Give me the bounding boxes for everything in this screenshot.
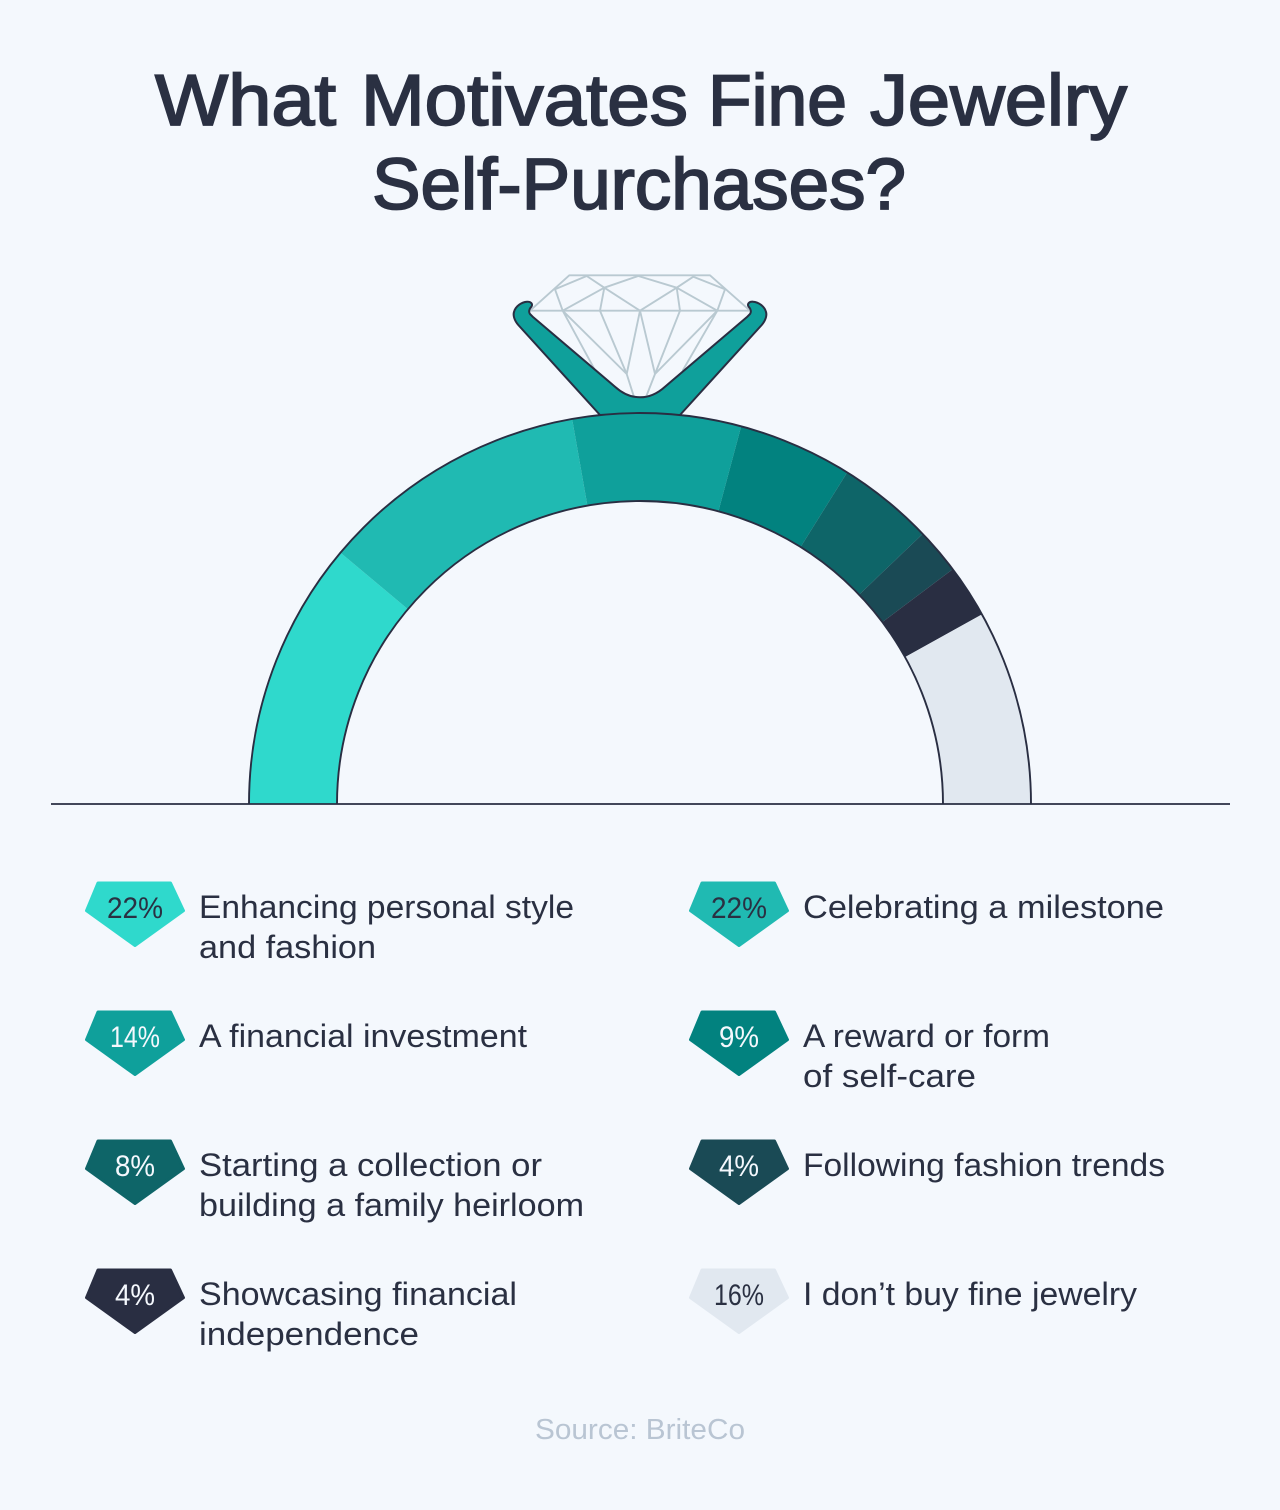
legend: 4% following fashion trends: Following fashion trends: [803, 1147, 1165, 1183]
legend: 22% celebrating a milestone: Celebrating a milestone: [803, 889, 1164, 925]
title: Fine: [708, 61, 847, 141]
source: Source: BriteCo: [535, 1414, 745, 1446]
legend: 8% starting a collection: 8%: [115, 1150, 155, 1183]
segment: 16% don't buy: [905, 614, 1031, 804]
legend: 22% enhancing personal style: Enhancing personal style: [199, 889, 574, 925]
legend: 4% following fashion trends: 4%: [719, 1150, 759, 1183]
title: Motivates: [361, 61, 688, 141]
legend: 4% showcasing financial independence: Showcasing financial: [199, 1276, 517, 1312]
legend: 22% enhancing personal style: [86, 883, 574, 965]
legend: 14% a financial investment: 14%: [110, 1021, 160, 1054]
legend: 8% starting a collection: [86, 1141, 584, 1223]
title: [155, 61, 1127, 225]
baseline: [51, 803, 1230, 805]
legend: 16% I don't buy fine jewelry: 16%: [714, 1279, 764, 1312]
legend: 4% showcasing financial independence: [86, 1270, 517, 1352]
legend: 9% a reward or form of self-care: A reward or form: [803, 1018, 1050, 1054]
segment: 8% collection or heirloom: [801, 472, 923, 595]
legend: 4% showcasing financial independence: independence: [199, 1316, 419, 1352]
title: Jewelry: [870, 61, 1127, 141]
segment: 4% fashion trends: [859, 534, 953, 622]
legend: 4% showcasing financial independence: 4%: [115, 1279, 155, 1312]
legend: 22% celebrating a milestone: [690, 883, 1164, 946]
segment: 22% celebrating a milestone: [340, 419, 587, 609]
segment: 9% reward or self-care: [718, 426, 847, 547]
legend: 9% a reward or form of self-care: of self-care: [803, 1058, 976, 1094]
legend: 4% following fashion trends: [690, 1141, 1165, 1204]
legend: 22% celebrating a milestone: 22%: [711, 892, 767, 925]
legend: 16% I don't buy fine jewelry: I don’t buy fine jewelry: [803, 1276, 1137, 1312]
icon: diamond: [530, 275, 750, 397]
icon: ring prong: [514, 302, 766, 415]
segment: 22% enhancing style: [249, 553, 408, 804]
segment: 14% financial investment: [572, 413, 741, 511]
legend: 22% enhancing personal style: and fashion: [199, 929, 376, 965]
ring outlines: [249, 413, 1031, 804]
legend: 8% starting a collection: building a family heirloom: [199, 1187, 584, 1223]
legend: 22% enhancing personal style: 22%: [107, 892, 163, 925]
title: Self-Purchases?: [372, 145, 906, 225]
title: What: [155, 61, 336, 141]
legend: 9% a reward or form of self-care: 9%: [719, 1021, 759, 1054]
legend: 9% a reward or form of self-care: [690, 1012, 1050, 1094]
legend: 8% starting a collection: Starting a collection or: [199, 1147, 542, 1183]
chart: ring segments: [249, 413, 1031, 804]
legend: 14% a financial investment: A financial investment: [199, 1018, 527, 1054]
legend: 14% a financial investment: [86, 1012, 527, 1074]
legend: 16% I don't buy fine jewelry: [690, 1270, 1137, 1332]
segment: 4% financial independence: [882, 569, 982, 657]
